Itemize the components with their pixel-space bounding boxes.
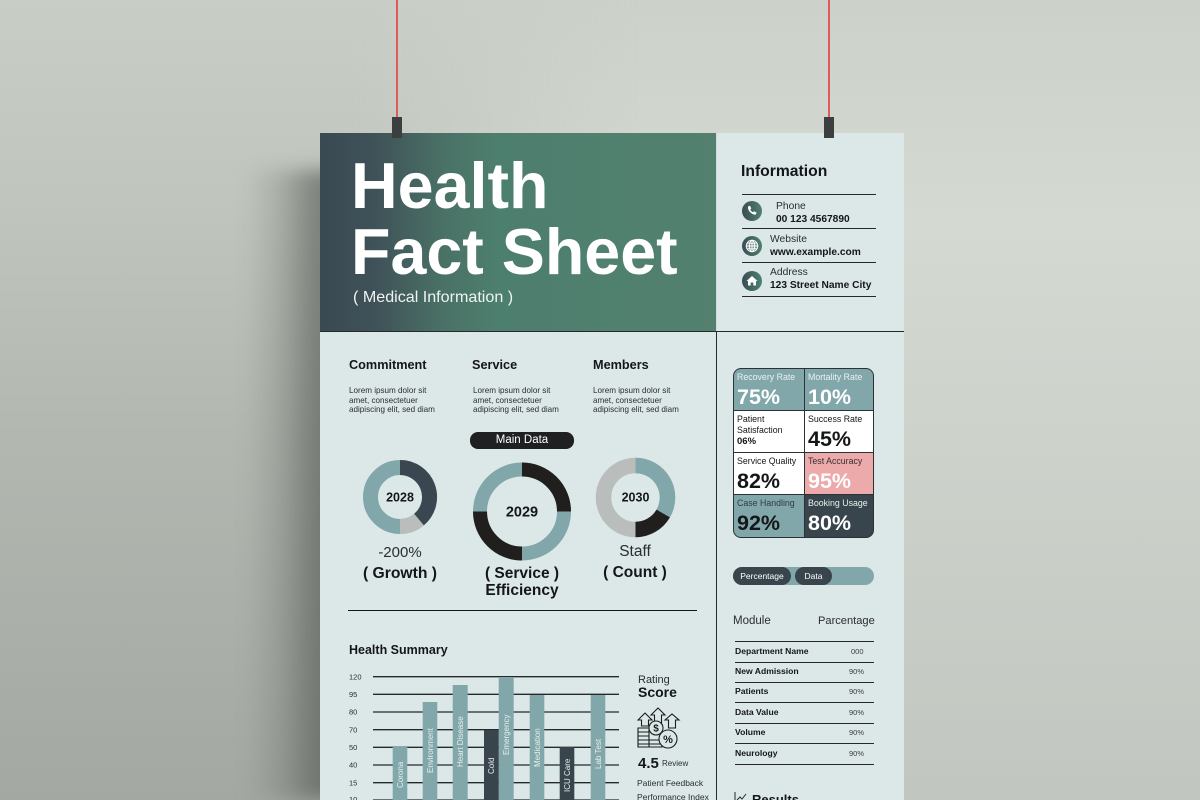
metric: case handling: Case Handling [737,498,795,508]
metric: case handling: 92% [737,511,780,535]
metric: patient satisfaction: 06% [737,436,756,447]
pill: data: Data [805,571,822,581]
icon: finance arrows: % [663,734,673,746]
icon: results chart [734,792,746,800]
list: rating items [637,778,709,800]
icon: finance arrows: $ [653,724,659,734]
label: rating: Rating [638,674,670,686]
icon: address house [742,271,762,291]
toggle bar [733,567,874,585]
metric: case handling [734,495,804,538]
value: review: 4.5 [638,755,659,772]
metric: mortality rate: 10% [808,385,851,409]
column: commitment [349,358,435,414]
title [351,150,678,288]
metrics grid [733,368,874,538]
column: members [593,358,679,414]
body text [349,386,435,414]
hanging cord and clip left [392,0,402,138]
body text: Lorem ipsum dolor sit [473,386,550,395]
table: module percentage: 90% [849,667,864,676]
bar chart: 80 [349,708,357,716]
hanging cord and clip right [824,0,834,138]
bar chart: Emergency [502,715,511,755]
icon: phone [742,201,762,221]
metric: patient satisfaction: Satisfaction [737,424,782,434]
label: staff count: ( Count ) [603,564,667,581]
label: staff count [603,543,667,581]
metric: booking usage [805,495,874,538]
heading: health summary: Health Summary [349,643,448,657]
table: module percentage: 90% [849,749,864,758]
row: data value: Data Value [735,707,778,717]
heading: Members [593,358,649,372]
bar chart: ICU Care [563,758,572,792]
pill: main data [470,432,574,449]
donut: 2030: 2030 [622,490,649,504]
panel: rating score [637,674,709,800]
donut: 2029 [473,462,571,560]
title: Fact Sheet [351,216,678,288]
table: module percentage: 000 [851,647,864,656]
row: department name: Department Name [735,646,809,656]
metric: mortality rate: Mortality Rate [808,372,862,382]
metric: mortality rate [805,369,874,410]
title: Health [351,150,548,222]
bar chart: Heart Disease [456,716,465,767]
results heading [734,792,799,800]
panel: information [741,163,876,297]
donut: 2030 [596,458,676,538]
metric: recovery rate: 75% [737,385,780,409]
label: service efficiency [485,565,559,599]
wall shading left [0,40,486,800]
metric: success rate: 45% [808,427,851,451]
row: new admission: New Admission [735,666,799,676]
metric: test accuracy: Test Accuracy [808,456,862,466]
label: growth: ( Growth ) [363,565,437,582]
body text [473,386,559,414]
bar chart: 15 [349,778,357,788]
panel: information: 00 123 4567890 [776,214,850,225]
list: rating items: Patient Feedback [637,778,703,788]
bar chart: Cold [487,758,496,774]
text: website: Website [770,234,807,245]
panel: information: www.example.com [770,247,861,258]
label: growth [363,544,437,582]
column: service [472,358,559,414]
table: module percentage [733,615,875,765]
row: volume: Volume [735,727,765,737]
metric: patient satisfaction: Patient [737,414,764,424]
bar chart: 70 [349,726,357,734]
text: address: Address [770,267,808,278]
metric: booking usage: 80% [808,511,851,535]
panel: information: 123 Street Name City [770,280,871,291]
body text: adipiscing elit, sed diam [593,405,679,414]
body text: amet, consectetuer [593,396,662,405]
row: neurology: Neurology [735,748,778,758]
bar chart: 120 [349,672,362,682]
metric: success rate [805,411,874,452]
body text: Lorem ipsum dolor sit [593,386,670,395]
icon: finance arrows [637,707,680,748]
metric: recovery rate [734,369,804,410]
label: service efficiency: ( Service ) [485,565,559,582]
metric: booking usage: Booking Usage [808,498,868,508]
body text: adipiscing elit, sed diam [473,405,559,414]
pill: main data: Main Data [496,434,548,446]
bar chart [349,672,619,800]
bar chart: Lab Test [594,738,603,769]
poster sheet [320,133,904,800]
table: module percentage: 90% [849,728,864,737]
table: module percentage: 90% [849,708,864,717]
bar chart: 40 [349,760,357,770]
metric: service quality: 82% [737,469,780,493]
icon: website globe [742,236,762,256]
table: module percentage: Parcentage [818,615,875,627]
bar chart: 95 [349,690,357,699]
metric: patient satisfaction [734,411,804,452]
pill: percentage: Percentage [740,571,784,581]
label: staff count: Staff [619,543,651,560]
body text: adipiscing elit, sed diam [349,405,435,414]
metric: success rate: Success Rate [808,414,862,424]
bar chart: 50 [349,743,357,752]
bar chart: Corona [396,761,405,788]
metric: test accuracy [805,453,874,494]
poster shadow [245,170,345,800]
body text: amet, consectetuer [349,396,418,405]
label: score: Score [638,684,677,700]
header banner [320,133,716,331]
bar chart: Environment [426,727,435,773]
label: service efficiency: Efficiency [485,582,559,599]
table header: Module [733,615,771,627]
subtitle: ( Medical Information ) [353,288,513,306]
label: growth: -200% [378,544,422,561]
text: phone: Phone [776,201,806,212]
panel: rating score: Review [662,759,688,768]
bar chart: Medication [533,728,542,767]
heading: Commitment [349,358,427,372]
metric: service quality [734,453,804,494]
body text: amet, consectetuer [473,396,542,405]
row: patients: Patients [735,686,768,696]
metric: service quality: Service Quality [737,456,796,466]
donut: 2029: 2029 [506,504,538,520]
metric: recovery rate: Recovery Rate [737,372,795,382]
table: module percentage: 90% [849,687,864,696]
heading: Service [472,358,517,372]
donut: 2028: 2028 [386,490,414,504]
donut: 2028 [363,460,438,534]
pill: percentage [733,567,791,585]
metric: test accuracy: 95% [808,469,851,493]
heading: information: Information [741,163,827,180]
pill: data [795,567,832,585]
body text: Lorem ipsum dolor sit [349,386,426,395]
body text [593,386,679,414]
